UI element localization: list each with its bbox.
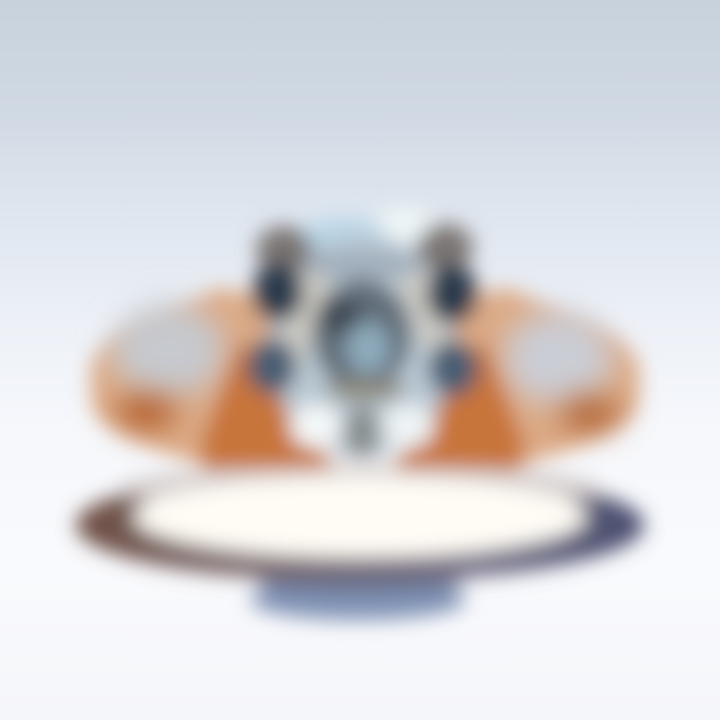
left orange wedge xyxy=(200,340,332,470)
right orange wedge xyxy=(395,340,525,470)
band shadow xyxy=(250,580,466,620)
stone dark patch xyxy=(318,298,362,334)
right stone xyxy=(504,312,612,404)
left stone xyxy=(112,304,224,396)
right shoulder base xyxy=(392,288,640,468)
centre stone xyxy=(270,208,454,458)
prong lower right xyxy=(428,340,478,396)
prong lower left xyxy=(247,338,297,394)
right shoulder: copper setting xyxy=(392,288,640,470)
left shoulder base xyxy=(90,288,335,468)
right dark spot xyxy=(560,396,620,432)
stone dark ring xyxy=(312,279,412,391)
band rim xyxy=(76,468,644,582)
prong upper right xyxy=(426,264,478,324)
stone top light blue xyxy=(297,218,393,262)
stone top highlight xyxy=(379,208,431,240)
stone light spot right xyxy=(382,404,434,448)
prong upper left xyxy=(252,262,304,322)
stone lower dark facet xyxy=(343,406,381,458)
ring xyxy=(76,208,644,620)
band inner opening xyxy=(134,477,586,557)
stone cream facet right xyxy=(398,268,444,390)
stone cream facet left xyxy=(282,268,332,390)
prongs xyxy=(247,224,478,396)
band bottom shade xyxy=(255,575,465,591)
stone light spot left xyxy=(290,404,342,448)
left shoulder: copper setting xyxy=(90,288,335,470)
left dark spot xyxy=(116,394,176,430)
stone body xyxy=(270,233,454,457)
ring band xyxy=(76,464,644,591)
stone lower brown xyxy=(325,379,405,401)
prong top right xyxy=(417,224,473,272)
prong top left xyxy=(256,226,312,274)
stone upper band xyxy=(300,249,424,279)
stone core highlight xyxy=(346,322,390,374)
band pale upper edge xyxy=(120,464,600,512)
